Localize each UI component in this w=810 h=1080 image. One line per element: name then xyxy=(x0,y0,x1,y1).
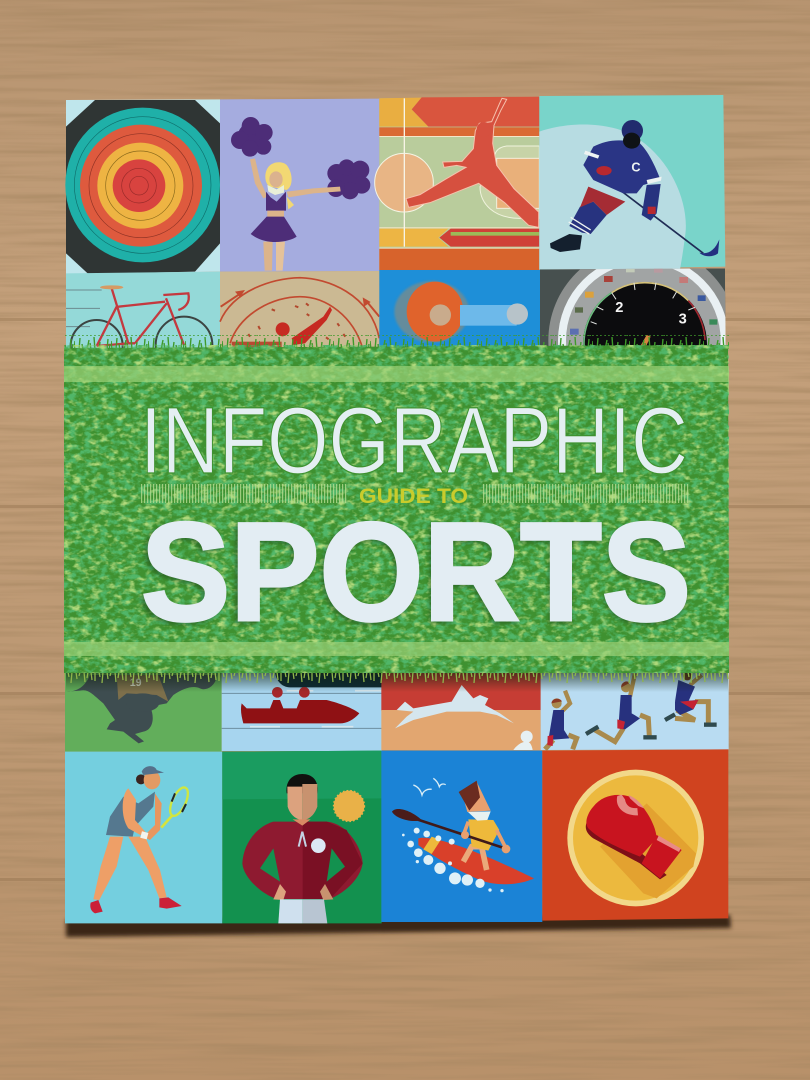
panel: long jump sequence xyxy=(541,670,729,750)
panel: cycling bike xyxy=(66,272,220,373)
panel: swimming xyxy=(381,670,541,750)
panel: table tennis ball xyxy=(379,270,540,348)
panel: cheerleader xyxy=(220,99,379,272)
panel: horse racing: 19 xyxy=(130,677,142,689)
panel: swimming track diagram xyxy=(220,271,379,353)
hatch left of subtitle xyxy=(140,484,347,503)
upper light stripe xyxy=(64,366,729,382)
panel: speed gauge: 2 xyxy=(615,300,623,316)
shadow under the band xyxy=(66,672,728,692)
panel: football manager xyxy=(222,751,382,923)
grass band xyxy=(64,335,729,692)
title shadow: SPORTS: SPORTS xyxy=(138,495,691,652)
book drop shadow xyxy=(66,915,731,937)
panel: archery target xyxy=(65,99,220,274)
panel: speed gauge: 3 xyxy=(679,311,687,327)
title: INFOGRAPHIC: INFOGRAPHIC xyxy=(140,388,688,494)
hatch right of subtitle xyxy=(482,484,689,503)
panel: bobsleigh xyxy=(222,670,382,751)
grass blades below the band xyxy=(64,671,729,685)
book cover xyxy=(65,95,738,923)
subtitle: GUIDE TO: GUIDE TO xyxy=(359,485,468,508)
lower light stripe xyxy=(64,642,729,656)
panel: ice hockey player xyxy=(539,95,725,269)
panel: boxing glove xyxy=(542,749,728,921)
panel: basketball court xyxy=(375,97,539,270)
panel: kayak surfer xyxy=(381,751,542,922)
grass blades above the band xyxy=(64,335,729,349)
panel: speed gauge xyxy=(540,268,726,346)
title: SPORTS: SPORTS xyxy=(141,493,691,650)
panel: horse racing xyxy=(65,670,222,752)
panel: ice hockey player: C xyxy=(631,160,641,174)
panel: tennis player xyxy=(65,752,222,923)
